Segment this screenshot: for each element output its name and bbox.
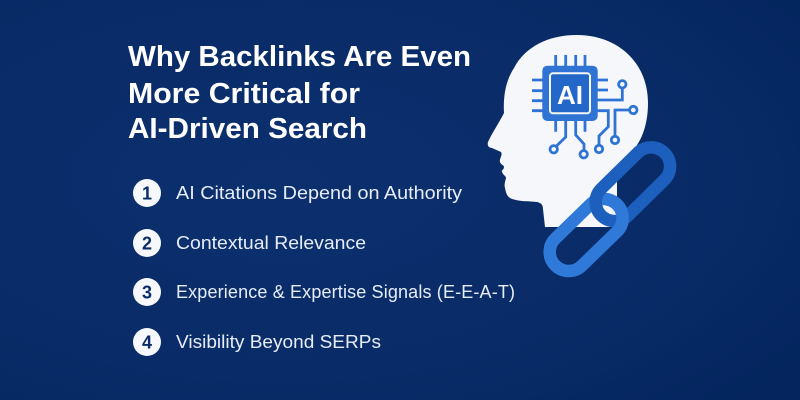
number badge 4 bbox=[133, 328, 161, 356]
title: AI-Driven Search bbox=[128, 113, 367, 145]
item 1 label: AI Citations Depend on Authority bbox=[176, 183, 462, 203]
chip inner frame bbox=[550, 73, 590, 113]
chip label: AI bbox=[557, 80, 583, 110]
item 3 label: Experience & Expertise Signals (E-E-A-T) bbox=[176, 282, 515, 302]
illustration: head with AI chip and chain link bbox=[488, 35, 678, 279]
chip pins bbox=[532, 55, 608, 132]
number badge 2 bbox=[133, 229, 161, 257]
number badge 1: 1 bbox=[142, 184, 152, 204]
list item 3 bbox=[133, 278, 515, 306]
icon: chain link bbox=[542, 139, 678, 279]
list item 4 bbox=[133, 328, 381, 356]
list item 1 bbox=[133, 179, 462, 207]
upper link bbox=[588, 139, 678, 229]
title: Why Backlinks Are Even bbox=[128, 41, 471, 73]
interlock overlap of lower link bbox=[607, 199, 623, 231]
number badge 4: 4 bbox=[142, 332, 152, 352]
chip body bbox=[542, 66, 598, 121]
item 4 label: Visibility Beyond SERPs bbox=[176, 332, 381, 352]
number badge 3 bbox=[133, 278, 161, 306]
circuit traces bbox=[550, 81, 637, 158]
list item 2 bbox=[133, 229, 366, 257]
number badge 1 bbox=[133, 179, 161, 207]
number badge 2: 2 bbox=[142, 234, 152, 254]
number badge 3: 3 bbox=[142, 282, 152, 302]
item 2 label: Contextual Relevance bbox=[176, 233, 366, 253]
lower link bbox=[542, 191, 631, 279]
icon: AI chip bbox=[532, 55, 608, 132]
title bbox=[128, 41, 471, 145]
icon: head silhouette bbox=[488, 35, 648, 227]
title: More Critical for bbox=[128, 78, 360, 110]
